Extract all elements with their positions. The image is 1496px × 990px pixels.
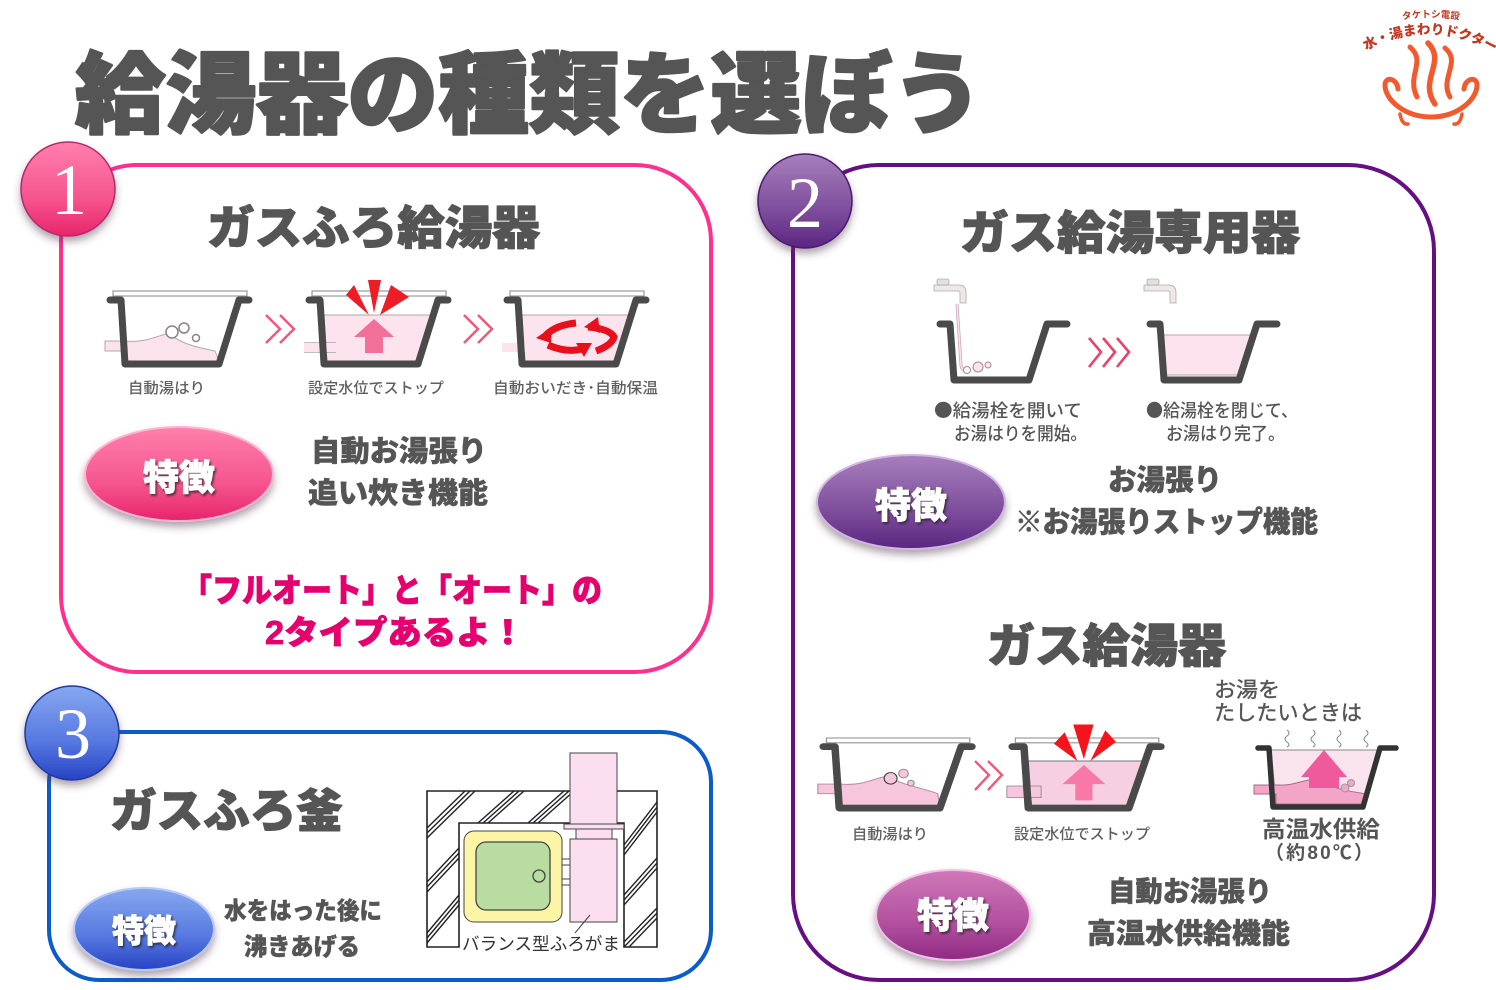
logo: [1362, 10, 1496, 126]
feature text: 水をはった後に: [224, 897, 382, 925]
heading: ガス給湯器: [987, 620, 1226, 672]
caption right: お湯はり完了。: [1166, 420, 1285, 446]
arrow: [266, 315, 294, 343]
logo company name: タケトシ電設: [1402, 10, 1460, 20]
feature text: [1015, 464, 1318, 539]
heading: ガスふろ給湯器: [207, 202, 540, 254]
number badge 2: [758, 154, 852, 248]
callout: 2タイプあるよ！: [265, 614, 525, 651]
panel: gas bath water heater: [21, 142, 711, 672]
label: 設定水位でストップ: [1014, 826, 1150, 843]
arrow: [464, 315, 492, 343]
tub step 2: stop at set level: [304, 280, 448, 364]
number badge 1: 1: [51, 150, 87, 230]
feature text: お湯張り: [1108, 464, 1222, 497]
feature text: 追い炊き機能: [308, 477, 488, 510]
caption left: お湯はりを開始。: [954, 420, 1087, 446]
note: たしたいときは: [1214, 702, 1362, 725]
label: 自動湯はり: [128, 380, 205, 397]
feature pill: 特徴: [143, 457, 215, 498]
title: 給湯器の種類を選ぼう: [75, 45, 983, 145]
feature pill: [817, 455, 1005, 549]
label: 自動おいだき･自動保温: [493, 380, 658, 397]
number badge 1: [21, 142, 115, 236]
panel: gas water heaters: [758, 154, 1434, 980]
note: [1214, 679, 1362, 725]
panel: gas bath kettle: [25, 686, 711, 980]
feature text: 沸きあげる: [244, 934, 360, 961]
tub: full after closing tap: [1144, 279, 1277, 380]
label high temperature: [1262, 816, 1380, 864]
feature text: 高温水供給機能: [1087, 918, 1290, 949]
diagram label: バランス型ふろがま: [462, 934, 620, 954]
callout: [182, 572, 602, 651]
logo service name: 水・湯まわりドクター: [1362, 23, 1496, 50]
feature pill: 特徴: [917, 895, 989, 936]
feature text: 自動お湯張り: [1108, 876, 1272, 907]
arrow: [975, 761, 1002, 790]
callout: 「フルオート」と「オート」の: [182, 572, 602, 609]
tub step: stop at set level: [1007, 725, 1161, 808]
tub: open tap: [934, 279, 1067, 380]
caption left: ●給湯栓を開いて: [934, 397, 1082, 423]
feature pill: [85, 427, 273, 521]
number badge 3: [25, 686, 119, 780]
arrow: [1089, 338, 1129, 367]
feature text: [308, 435, 488, 510]
label: 設定水位でストップ: [308, 380, 444, 397]
tub step: auto fill: [818, 738, 972, 808]
tub step 1: auto fill: [105, 291, 249, 364]
feature text: 自動お湯張り: [311, 435, 487, 468]
logo steam and tub icon: [1385, 43, 1477, 124]
number badge 3: 3: [55, 694, 91, 774]
feature text: ※お湯張りストップ機能: [1015, 506, 1318, 539]
feature pill: [74, 888, 214, 970]
feature pill: [876, 870, 1030, 960]
diagram: balanced flue bath kettle: [427, 753, 657, 954]
feature text: [224, 897, 382, 961]
heading: ガスふろ釜: [110, 785, 343, 837]
feature pill: 特徴: [875, 485, 947, 526]
tub step 3: reheat: [502, 291, 646, 364]
label high temperature: （約80℃）: [1265, 842, 1373, 864]
label high temperature: 高温水供給: [1262, 816, 1380, 842]
tub: high temperature water: [1254, 730, 1396, 807]
caption right: [1146, 397, 1298, 446]
heading: ガス給湯専用器: [960, 207, 1300, 259]
caption left: [934, 397, 1087, 446]
caption right: ●給湯栓を閉じて、: [1146, 397, 1298, 423]
note: お湯を: [1214, 679, 1280, 702]
feature text: [1087, 876, 1290, 949]
number badge 2: 2: [787, 163, 823, 243]
feature pill: 特徴: [112, 913, 176, 949]
label: 自動湯はり: [852, 826, 928, 843]
